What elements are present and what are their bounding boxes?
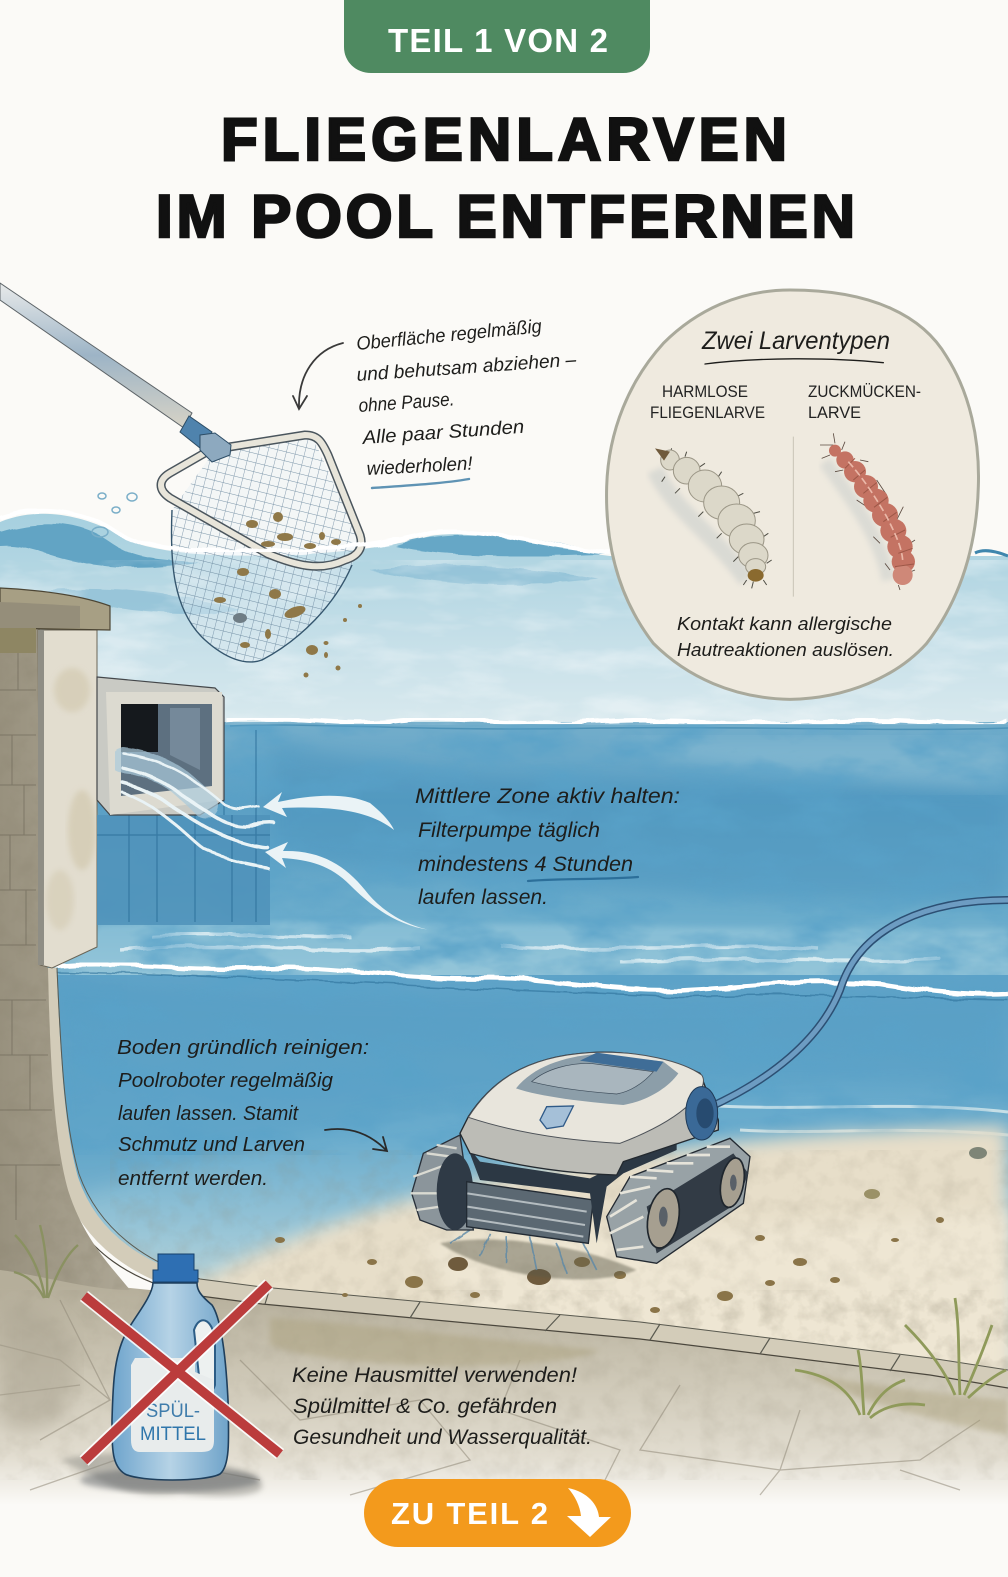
hose <box>708 900 1008 1108</box>
annotation: skim surface: und behutsam abziehen – <box>356 350 577 386</box>
annotation: skim surface: wiederholen! <box>366 453 474 480</box>
grass right <box>795 1298 1006 1418</box>
bottle cap <box>153 1254 198 1282</box>
annotation: skim surface <box>293 316 577 488</box>
text: larva types: Kontakt kann allergische <box>677 614 892 634</box>
annotation: filter pump: Filterpumpe täglich <box>418 819 600 842</box>
annotation: robot: laufen lassen. Stamit <box>118 1103 299 1125</box>
panel: two larva types <box>607 290 979 699</box>
annotation: filter pump: laufen lassen. <box>418 886 548 909</box>
pillar <box>38 630 97 968</box>
annotation: robot: entfernt werden. <box>118 1168 268 1190</box>
annotation: skim surface: Alle paar Stunden <box>361 417 525 449</box>
net bag <box>171 436 360 662</box>
bottle shadow <box>80 1468 260 1492</box>
annotation: robot: Schmutz und Larven <box>118 1134 305 1156</box>
wheels <box>643 1186 684 1251</box>
sand floor <box>110 1125 1008 1420</box>
right track <box>607 1138 750 1263</box>
arrows: flow direction <box>263 792 430 930</box>
text: larva types: Zwei Larventypen <box>701 327 890 355</box>
annotation: filter pump: mindestens 4 Stunden <box>418 853 633 876</box>
robot pool cleaner <box>411 1052 750 1279</box>
label text: SPÜL- <box>146 1401 200 1422</box>
body <box>460 1052 718 1175</box>
larva: midge <box>820 433 915 590</box>
splash droplets <box>92 493 137 537</box>
water jet from skimmer <box>123 753 275 868</box>
paving with pool edge <box>0 968 1008 1510</box>
annotation: skim surface: Oberfläche regelmäßig <box>355 316 543 355</box>
bottle handle hole <box>194 1320 215 1392</box>
text: larva types: ZUCKMÜCKEN- <box>808 382 921 401</box>
title: IM POOL ENTFERNEN <box>156 183 855 250</box>
water overlapping net <box>170 538 400 551</box>
text: larva types: HARMLOSE <box>662 382 748 401</box>
larva: fly <box>655 448 772 588</box>
annotation: robot <box>117 1037 387 1190</box>
underline <box>528 877 638 881</box>
wave line: lower surface <box>55 964 1008 1000</box>
dirt spray <box>440 1240 637 1279</box>
text: larva types <box>650 327 921 660</box>
button: to part 2: ZU TEIL 2 <box>391 1496 548 1531</box>
left track <box>412 1135 473 1230</box>
panel: top water zone <box>0 511 1008 725</box>
skimmer <box>97 677 270 925</box>
panel background <box>607 290 979 699</box>
debris in net <box>214 512 362 678</box>
title: FLIEGENLARVEN <box>221 106 787 173</box>
panel: middle water zone <box>0 718 1008 985</box>
paving stones <box>0 1265 1008 1510</box>
rocks on pool floor <box>275 1147 987 1313</box>
tiled wall panel <box>97 815 270 925</box>
bottle with cross <box>80 1254 280 1492</box>
hose hub <box>686 1087 718 1140</box>
lower body dark <box>467 1137 677 1243</box>
handle <box>580 1053 663 1072</box>
bottle body <box>112 1283 229 1480</box>
bottle with cross: MITTEL <box>140 1424 206 1445</box>
roller <box>467 1182 593 1243</box>
grass left <box>14 1225 78 1298</box>
red cross <box>84 1284 280 1461</box>
water texture <box>0 560 1008 1155</box>
warning text <box>292 1364 592 1449</box>
arrow to net <box>293 343 343 409</box>
skimmer opening <box>121 704 212 796</box>
net frame <box>161 435 361 566</box>
annotation: filter pump <box>415 785 680 909</box>
text: larva types: LARVE <box>808 403 861 422</box>
panel: lower water zone <box>0 975 1008 1400</box>
arrow to robot <box>325 1129 387 1151</box>
annotation: robot: Boden gründlich reinigen: <box>117 1037 369 1059</box>
pool wall <box>0 588 140 1295</box>
text: larva types: FLIEGENLARVE <box>650 403 765 422</box>
badge: part 1 of 2 <box>344 0 650 73</box>
title <box>156 106 855 250</box>
title underline <box>705 359 883 364</box>
button: to part 2 <box>364 1479 631 1547</box>
underline <box>372 479 469 488</box>
pool edge coping <box>48 968 1008 1379</box>
badge <box>540 1106 573 1129</box>
pool net <box>0 283 400 678</box>
bottle label <box>131 1358 214 1452</box>
skimmer frame <box>97 677 224 815</box>
text: larva types: Hautreaktionen auslösen. <box>677 640 894 660</box>
pole <box>0 283 192 428</box>
body window <box>516 1054 678 1105</box>
annotation: skim surface: ohne Pause. <box>358 389 455 417</box>
warning text: Spülmittel & Co. gefährden <box>293 1395 557 1418</box>
coping stone <box>0 588 110 630</box>
warning text: Keine Hausmittel verwenden! <box>292 1364 577 1387</box>
net collar <box>180 416 212 448</box>
stone wall <box>0 625 130 1290</box>
badge: part 1 of 2: TEIL 1 VON 2 <box>388 22 608 59</box>
divider <box>792 437 795 597</box>
annotation: robot: Poolroboter regelmäßig <box>118 1070 333 1092</box>
arrow down <box>567 1488 611 1537</box>
annotation: filter pump: Mittlere Zone aktiv halten: <box>415 785 680 808</box>
warning text: Gesundheit und Wasserqualität. <box>293 1426 592 1449</box>
